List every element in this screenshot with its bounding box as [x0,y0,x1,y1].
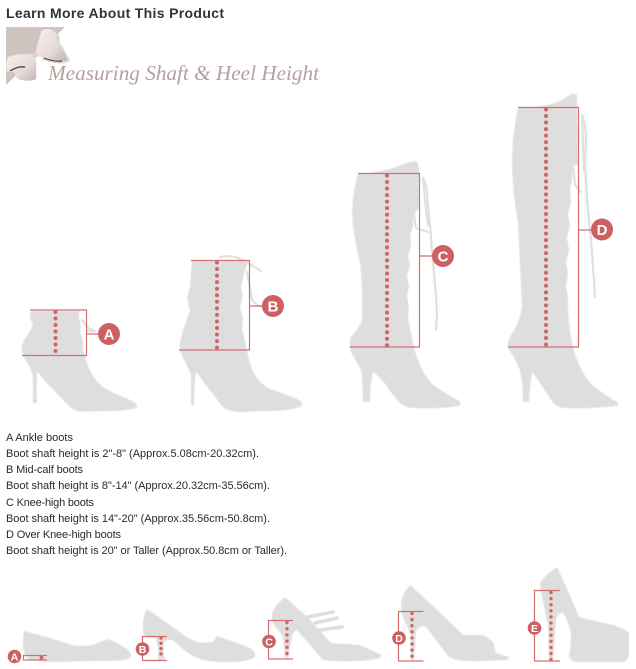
icon: ribbon bow [6,29,70,81]
boot B: mid-calf boot [179,256,302,412]
shaft measure A [22,310,98,356]
shaft measure D [508,108,592,347]
label A: A [11,652,19,664]
shoe A: flat [8,631,131,664]
heel measure B [142,636,167,660]
silhouette [401,585,509,661]
silhouette [350,161,460,408]
label D: D [597,222,608,239]
heel measure E [534,590,560,661]
shoe E: platform high heel [528,567,629,662]
silhouette [540,567,629,662]
silhouette [23,631,131,662]
size descriptions: Boot shaft height is 2"-8" (Approx.5.08cm-20.32cm). [6,448,259,460]
label D: D [395,633,403,645]
heel measure D [398,612,424,661]
label D [591,218,613,240]
label B: B [139,644,147,656]
title: Learn More About This Product [6,5,224,21]
boot D: over-knee boot [508,94,618,408]
shaft measure B [179,260,263,350]
silhouette [22,311,137,412]
silhouette [272,597,382,661]
size descriptions [6,432,287,557]
silhouette [143,609,255,662]
size descriptions: Boot shaft height is 14"-20" (Approx.35.56cm-50.8cm). [6,513,270,525]
size descriptions: D Over Knee-high boots [6,529,122,541]
boot A: ankle boot [22,310,137,412]
size descriptions: B Mid-calf boots [6,464,84,476]
shoe D: peep-toe high heel [392,585,509,661]
label B [262,295,284,317]
banner: measuring shaft and heel height [6,27,320,85]
banner corner triangle [6,27,65,85]
shoe C: strappy mid heel [262,597,382,661]
heel measure A [24,656,47,660]
silhouette [508,94,618,408]
boot C: knee-high boot [350,161,460,408]
shaft measure C [350,174,433,347]
size descriptions: Boot shaft height is 8"-14" (Approx.20.32cm-35.56cm). [6,480,270,492]
label B: B [268,298,279,316]
size descriptions: Boot shaft height is 20" or Taller (Approx.50.8cm or Taller). [6,545,287,557]
label A: A [104,326,115,344]
heel measure C [268,620,293,659]
size descriptions: A Ankle boots [6,432,74,444]
label C: C [265,636,273,648]
banner script heading: Measuring Shaft & Heel Height [47,61,320,85]
label E: E [531,623,538,635]
label C [432,245,454,267]
silhouette [180,261,302,412]
shoe B: low heel [136,609,255,662]
size descriptions: C Knee-high boots [6,497,94,509]
label C: C [438,248,449,266]
